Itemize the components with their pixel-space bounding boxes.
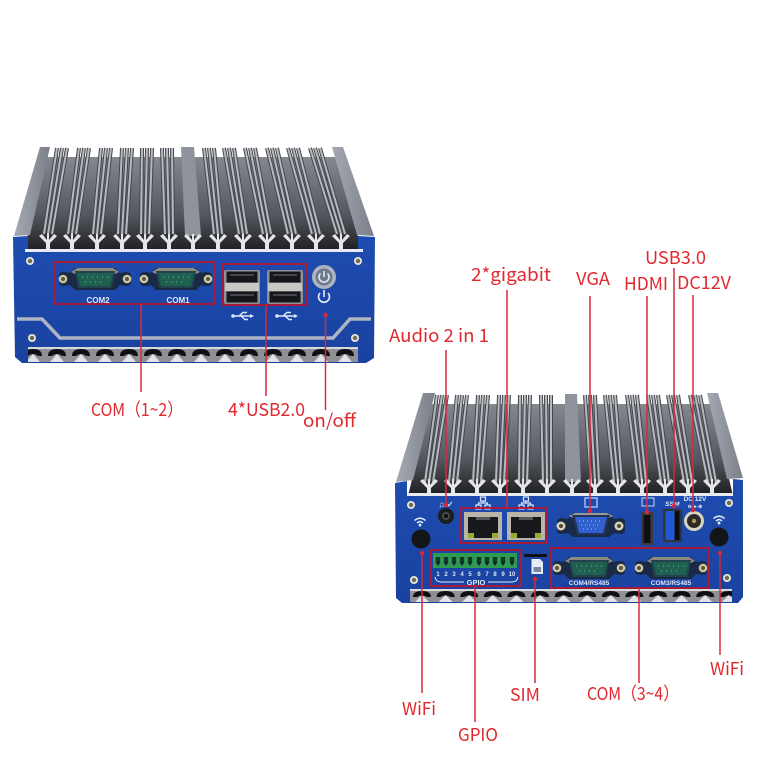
icon: USB symbols [231, 312, 298, 320]
label: 4*USB2.0: 4*USB2.0 [228, 396, 305, 422]
port: VGA [556, 498, 625, 537]
label: Audio 2 in 1: Audio 2 in 1 [389, 322, 489, 348]
port: COM2 [59, 268, 131, 305]
port: COM3: COM3/RS485 [651, 580, 692, 587]
panel screws [407, 499, 733, 584]
label: GPIO: GPIO [458, 721, 498, 747]
heatsink: front view [14, 147, 374, 252]
label: USB3.0: USB3.0 [645, 244, 706, 270]
label: 2*gigabit: 2*gigabit [471, 261, 551, 287]
port: COM1 [140, 268, 212, 305]
GPIO terminal: GPIO [467, 578, 486, 587]
GPIO terminal: 8 [493, 572, 497, 578]
vent slots [410, 589, 732, 602]
callout boxes [54, 262, 709, 588]
GPIO terminal: 7 [485, 572, 489, 578]
chassis: front panel [13, 236, 375, 363]
power button [312, 265, 336, 289]
label: WiFi left: WiFi [402, 695, 436, 721]
GPIO terminal: 6 [477, 572, 481, 578]
port: USB pair 2 [267, 270, 303, 304]
icon: power [318, 290, 330, 302]
GPIO terminal: 3 [452, 572, 456, 578]
heatsink: rear view [396, 393, 743, 496]
label: SIM: SIM [510, 681, 540, 707]
callout leader lines [141, 268, 722, 722]
GPIO terminal: 1 [436, 572, 440, 578]
port: USB pair 1 [224, 270, 260, 304]
port: DC 12V: DC 12V [684, 496, 707, 503]
chassis: rear panel [395, 479, 743, 603]
label: on/off: on/off [303, 407, 357, 433]
port: LAN 1 [507, 497, 545, 540]
port: LAN 2 [464, 497, 502, 540]
GPIO terminal: 2 [444, 572, 448, 578]
port: COM3 [635, 557, 707, 587]
port: COM4 [553, 557, 625, 587]
device: rear view mini PC [395, 393, 743, 603]
label: HDMI: HDMI [624, 270, 668, 296]
GPIO terminal: 5 [468, 572, 472, 578]
port: DC 12V [684, 496, 707, 531]
WiFi antenna right [710, 516, 728, 546]
device: front view mini PC [13, 147, 375, 363]
GPIO terminal: 4 [460, 572, 464, 578]
port: audio jack: ♫ ✓ [439, 500, 453, 509]
label: DC12V: DC12V [677, 269, 732, 295]
GPIO terminal [433, 553, 518, 587]
label: WiFi right: WiFi [710, 655, 744, 681]
panel screws [26, 257, 362, 342]
port: USB 3.0: SS⇄ [665, 501, 681, 508]
port: COM4: COM4/RS485 [569, 580, 610, 587]
label: VGA: VGA [576, 265, 610, 291]
WiFi antenna left [412, 518, 430, 548]
port: DC 12V: ⊖-●-⊕ [688, 504, 702, 510]
port: COM1: COM1 [166, 296, 190, 305]
GPIO terminal: 10 [509, 572, 516, 578]
port: USB 3.0 [663, 501, 682, 542]
GPIO terminal: 9 [501, 572, 505, 578]
label: COM 3~4: COM（3~4） [587, 680, 679, 706]
trim stripe [17, 319, 371, 338]
port: audio jack [438, 500, 454, 524]
label: COM 1~2: COM（1~2） [91, 396, 183, 422]
vent slots [28, 347, 358, 362]
port: HDMI [641, 498, 654, 545]
SIM slot [524, 554, 547, 574]
port: COM2: COM2 [86, 296, 110, 305]
